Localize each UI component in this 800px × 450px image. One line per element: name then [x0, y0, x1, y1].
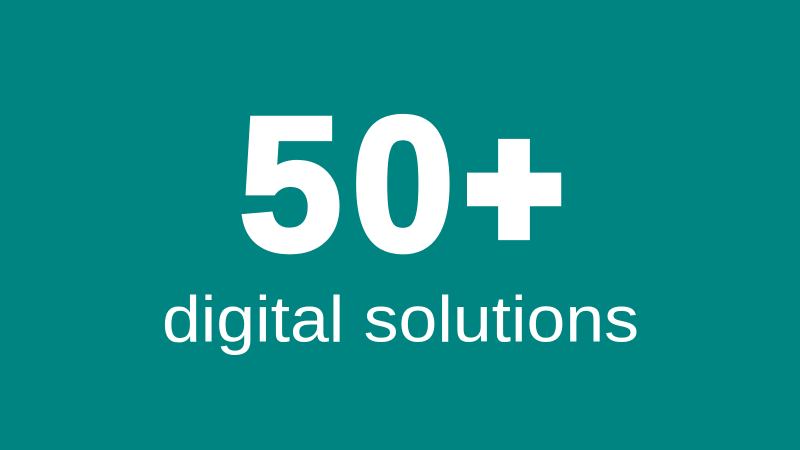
- caption: digital solutions: [162, 282, 639, 356]
- big number: 0: [352, 78, 454, 290]
- big number: +: [467, 92, 561, 282]
- big number: 5: [239, 78, 342, 290]
- big number: [239, 78, 561, 290]
